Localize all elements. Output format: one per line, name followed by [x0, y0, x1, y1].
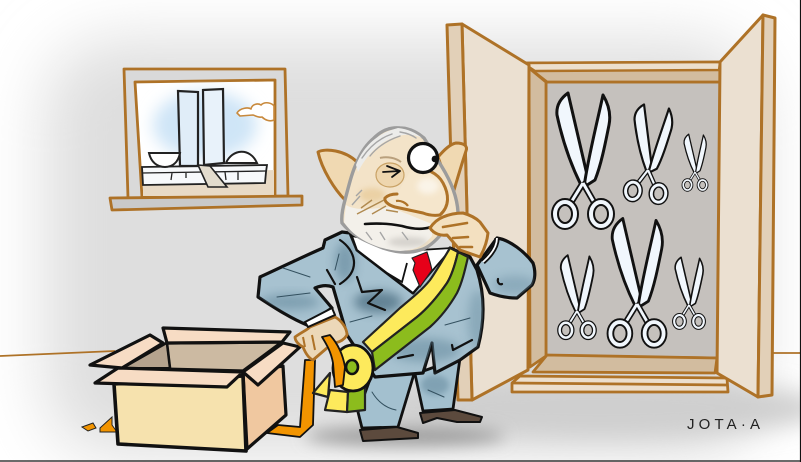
orange ribbon in hand — [322, 335, 345, 387]
sash green stripe — [372, 252, 468, 370]
cabinet base ledge — [512, 376, 728, 392]
open eye — [408, 144, 438, 172]
hair — [356, 128, 422, 172]
trouser shading — [421, 375, 449, 395]
box side face — [243, 366, 286, 449]
sash roll tail — [313, 373, 330, 397]
box left flap — [90, 335, 163, 368]
jacket shading — [260, 242, 537, 362]
shoes — [360, 410, 482, 441]
jacket body — [258, 232, 483, 377]
right ear — [438, 143, 467, 197]
orange ribbon on floor — [82, 360, 315, 437]
shirt cuff — [305, 308, 335, 327]
right sleeve cuff — [483, 238, 497, 262]
left door — [462, 24, 529, 400]
window with Brasilia view — [110, 69, 302, 210]
window frame — [124, 69, 288, 198]
dome — [226, 152, 257, 163]
moustache strokes — [357, 200, 398, 214]
beard strokes — [352, 190, 408, 240]
cabinet top — [523, 62, 720, 82]
cabinet back panel — [546, 82, 720, 358]
cabinet with scissors — [447, 15, 775, 400]
box right flap — [243, 343, 300, 385]
left ear — [318, 150, 357, 200]
left hand holding ribbon — [295, 317, 347, 360]
ramp — [198, 165, 227, 187]
man with presidential sash — [258, 128, 537, 441]
right hand — [430, 213, 488, 257]
winking eye — [383, 166, 400, 177]
scissors medium top — [625, 103, 675, 203]
trousers — [358, 358, 460, 428]
shirt — [352, 236, 452, 293]
sky tint — [143, 91, 274, 196]
floor shadow — [375, 378, 801, 438]
beard shading — [388, 237, 428, 247]
floor line left — [0, 351, 115, 356]
sash yellow stripe — [363, 248, 458, 352]
floor line right — [772, 352, 801, 354]
tower left — [178, 91, 198, 166]
right sleeve — [477, 238, 535, 298]
nose highlight — [417, 178, 439, 194]
scissors small bottom right — [674, 257, 704, 328]
shirt collar lines — [387, 263, 407, 282]
winking eye patch — [376, 163, 404, 187]
jacket folds — [327, 240, 502, 358]
brow — [380, 157, 401, 162]
box back flap — [163, 328, 290, 343]
nose — [385, 168, 448, 215]
window sill — [110, 196, 302, 210]
bowl — [149, 153, 180, 167]
tower right — [203, 89, 224, 165]
man shadow — [305, 426, 505, 446]
cabinet bottom — [533, 355, 717, 373]
box front flap — [95, 368, 243, 387]
scissors medium bottom left — [560, 255, 594, 338]
congress platform — [142, 165, 267, 185]
cabinet left side — [529, 68, 546, 367]
artist signature: JOTA·A — [687, 416, 760, 433]
sash — [313, 248, 468, 412]
open cardboard box — [90, 328, 300, 451]
window glass — [135, 80, 275, 197]
box interior — [123, 342, 282, 371]
box front face — [114, 376, 246, 451]
scissors small top right — [683, 134, 707, 190]
mouth — [365, 224, 431, 229]
cloud — [237, 103, 274, 121]
head — [342, 128, 458, 252]
nostril — [396, 201, 408, 206]
scissors large top left — [555, 93, 611, 226]
cheek shading — [359, 188, 385, 202]
beard — [344, 205, 432, 251]
red tie — [412, 252, 432, 287]
sash roll — [333, 345, 373, 391]
right door — [717, 15, 763, 397]
scissors large bottom centre — [610, 218, 664, 345]
